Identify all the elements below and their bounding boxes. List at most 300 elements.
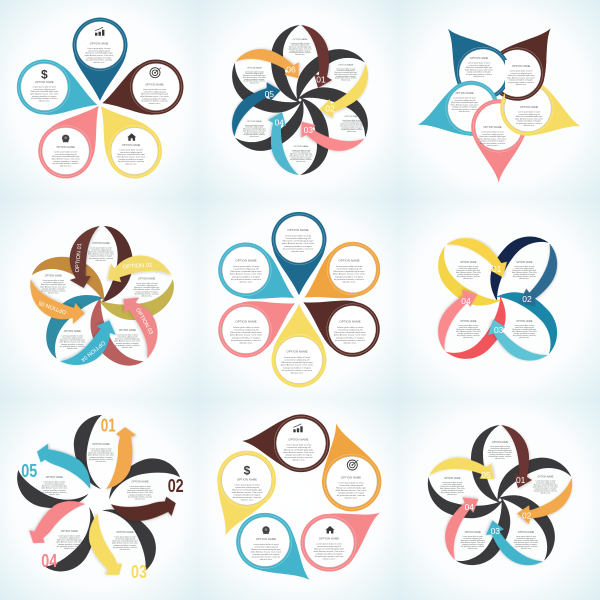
text: lower right option: dis parturient montes, nascetur: [113, 546, 138, 549]
text: yellow option: [515, 105, 543, 127]
text: top option: [88, 443, 114, 463]
text: top option: OPTION NAME: [92, 443, 110, 446]
text: teal option: dolor. Aenean massa. Cum sociis: [451, 103, 478, 106]
text: yellow option: ridiculus mus.: [241, 498, 254, 502]
text: teal option: Lorem ipsum dolor sit amet: [233, 265, 260, 268]
text: brown option: OPTION NAME: [339, 320, 361, 324]
text: lower right option: dolor. Aenean massa. Cum sociis: [514, 541, 539, 544]
text: pink option: consectetur adipiscing elit: [482, 133, 504, 136]
text: option lower left: Maecenas commodo ligula eget: [243, 128, 266, 131]
text: brown option: ridiculus mus.: [292, 458, 305, 462]
text: pink option: consectetur adipiscing elit: [317, 545, 341, 548]
text: blue option: [282, 228, 315, 253]
text: teal option: dis parturient montes, nascetur: [231, 278, 261, 281]
text: top option: consectetur adipiscing elit: [490, 447, 510, 450]
text: lower right option: ridiculus mus.: [120, 549, 131, 551]
text: teal option: natoque penatibus et magnis: [452, 105, 477, 108]
text: orange option: ridiculus mus.: [342, 281, 356, 284]
text: option bottom: dolor. Aenean massa. Cum sociis: [289, 154, 313, 157]
text: pink option: natoque penatibus et magnis: [232, 336, 261, 339]
arrow: option 04: [60, 311, 121, 379]
text: brown option: Lorem ipsum dolor sit amet: [286, 444, 311, 446]
arrow: 06 orange: [236, 35, 306, 93]
teardrop: orange: [307, 416, 388, 518]
text: left option: [41, 476, 67, 496]
text: left option: ridiculus mus.: [49, 494, 60, 496]
text: pink option: consectetur adipiscing elit: [233, 328, 259, 331]
text: yellow option: dolor. Aenean massa. Cum sociis: [515, 117, 543, 120]
text: lower left option: Lorem ipsum dolor sit amet: [62, 334, 83, 337]
text: upper right option: [512, 261, 537, 280]
text: upper left option: consectetur adipiscing elit: [459, 267, 478, 270]
text: option top: dis parturient montes, nascetur: [289, 51, 311, 54]
text: option bottom: Lorem ipsum dolor sit amet: [292, 149, 311, 152]
text: pink option: dis parturient montes, nascetur: [315, 555, 344, 558]
teardrop: pink: [290, 488, 395, 582]
text: brown option: [334, 320, 367, 344]
text: lower right option: consectetur adipiscing elit: [516, 537, 536, 540]
text: teal option: Maecenas commodo ligula eget: [31, 90, 58, 93]
text: lower left option: ridiculus mus.: [463, 337, 474, 339]
text: lower right option: Lorem ipsum dolor sit amet: [516, 535, 537, 538]
text: brown option: Maecenas commodo ligula eget: [335, 331, 366, 334]
text: teal option: consectetur adipiscing elit: [254, 546, 278, 548]
text: top option: natoque penatibus et magnis: [90, 456, 112, 459]
text: lower left option: consectetur adipiscing elit: [459, 326, 478, 329]
text: brown option: consectetur adipiscing elit: [143, 90, 166, 93]
text: lower left option: Maecenas commodo ligula eget: [456, 328, 481, 331]
text: blue option: dis parturient montes, nascetur: [466, 73, 492, 76]
text: blue option: [85, 42, 113, 64]
text: brown option: Maecenas commodo ligula eget: [508, 74, 535, 77]
text: lower left option: [456, 320, 481, 339]
icon: target: [150, 68, 161, 78]
text: lower right option: Maecenas commodo ligula eget: [514, 539, 538, 542]
text: left option: Lorem ipsum dolor sit amet: [442, 481, 463, 484]
icon: dollar: $: [244, 464, 251, 478]
text: right option: Lorem ipsum dolor sit amet: [535, 480, 556, 483]
text: lower right option: [112, 531, 138, 551]
text: brown option: [140, 82, 169, 105]
text: yellow option: dolor. Aenean massa. Cum sociis: [281, 364, 314, 367]
text: right option: ridiculus mus.: [540, 493, 551, 495]
text: blue option: dolor. Aenean massa. Cum sociis: [282, 242, 315, 245]
text: brown option: dis parturient montes, nascetur: [284, 456, 313, 459]
icon: chart: [95, 27, 104, 36]
text: lower right option: natoque penatibus et magnis: [515, 543, 537, 546]
text: left option: OPTION NAME: [45, 275, 62, 278]
numbers: [465, 470, 532, 536]
text: top option: OPTION NAME: [492, 441, 509, 444]
text: pink option: [479, 125, 506, 147]
numbers: 01: [516, 475, 526, 485]
text: teal option: dolor. Aenean massa. Cum sociis: [30, 93, 59, 96]
teardrop: blue: [272, 212, 326, 295]
text: option lower left: Lorem ipsum dolor sit amet: [245, 124, 264, 127]
teardrop: brown: [290, 278, 390, 367]
text: upper left option: Maecenas commodo ligula eget: [456, 269, 481, 272]
text: right option: consectetur adipiscing elit: [137, 284, 157, 287]
text: option upper left: Maecenas commodo ligula eget: [243, 74, 266, 77]
text: teal option: ridiculus mus.: [38, 99, 51, 102]
text: left option: natoque penatibus et magnis: [442, 489, 463, 492]
text: right option: Maecenas commodo ligula eget: [534, 484, 558, 487]
arrow: option 02: [103, 247, 171, 294]
text: option upper right: Maecenas commodo ligula eget: [335, 71, 357, 74]
icon: target: [347, 460, 358, 470]
text: brown option: ridiculus mus.: [515, 83, 527, 86]
panel: six teardrops: [208, 212, 390, 387]
text: orange option: dolor. Aenean massa. Cum sociis: [336, 489, 366, 492]
teardrop: orange: [290, 232, 390, 321]
text: teal option: Lorem ipsum dolor sit amet: [33, 86, 56, 89]
arrow: 04 pink: [24, 487, 85, 554]
text: blue option: Maecenas commodo ligula eget: [466, 66, 493, 69]
teardrop: brown: [94, 53, 190, 129]
text: teal option: ridiculus mus.: [239, 281, 253, 284]
text: lower left option: ridiculus mus.: [64, 548, 75, 550]
text: top option: Lorem ipsum dolor sit amet: [90, 246, 112, 249]
text: lower left option: dis parturient montes, nascetur: [57, 545, 82, 548]
text: lower left option: [56, 530, 82, 550]
text: option lower right: ridiculus mus.: [347, 131, 357, 133]
text: teal option: [451, 91, 478, 113]
text: option upper left: consectetur adipiscing elit: [245, 72, 264, 75]
text: pink option: Maecenas commodo ligula eget: [231, 331, 262, 334]
text: pink option: OPTION NAME: [319, 536, 339, 540]
text: orange option: dis parturient montes, nascetur: [334, 278, 364, 281]
text: lower right option: dis parturient montes, nascetur: [115, 344, 140, 347]
text: top option: Lorem ipsum dolor sit amet: [90, 447, 112, 450]
arrow: 02 brown: [111, 485, 179, 533]
text: top option: dolor. Aenean massa. Cum sociis: [88, 454, 114, 457]
text: lower left option: Lorem ipsum dolor sit amet: [59, 534, 80, 537]
text: brown option: natoque penatibus et magnis: [285, 454, 312, 456]
text: orange option: Maecenas commodo ligula eget: [334, 270, 365, 273]
text: lower right option: consectetur adipiscing elit: [117, 335, 138, 338]
text: lower right option: dis parturient montes, nascetur: [513, 334, 536, 337]
text: pink option: Lorem ipsum dolor sit amet: [316, 542, 342, 546]
text: option upper right: natoque penatibus et magnis: [336, 75, 356, 78]
text: top option: dis parturient montes, nascetur: [89, 257, 114, 260]
text: option lower left: consectetur adipiscing elit: [245, 126, 264, 129]
text: blue option: Lorem ipsum dolor sit amet: [468, 62, 491, 64]
dark bands: [420, 425, 572, 578]
text: lower right option: Maecenas commodo ligula eget: [115, 337, 140, 340]
teardrop: blue: [426, 12, 521, 111]
text: lower right option: [514, 531, 539, 550]
text: blue option: consectetur adipiscing elit: [88, 49, 110, 52]
text: pink option: dolor. Aenean massa. Cum sociis: [230, 334, 263, 337]
text: lower right option: dolor. Aenean massa. Cum sociis: [512, 330, 537, 333]
numbers: 03: [491, 526, 500, 536]
text: teal option: [230, 258, 263, 284]
text: right option: natoque penatibus et magnis: [135, 290, 158, 293]
text: pink option: dolor. Aenean massa. Cum sociis: [314, 550, 344, 553]
text: lower left option: consectetur adipiscing elit: [463, 537, 483, 540]
text: lower right option: natoque penatibus et magnis: [116, 342, 139, 345]
text: yellow option: consectetur adipiscing elit: [518, 113, 540, 116]
band: yellow: [425, 245, 501, 321]
text: lower right option: Maecenas commodo ligula eget: [113, 539, 138, 542]
teardrop: blue: [72, 18, 128, 101]
text: blue option: OPTION NAME: [287, 228, 309, 232]
text: upper right option: natoque penatibus et magnis: [514, 273, 535, 276]
text: orange option: consectetur adipiscing elit: [339, 484, 363, 487]
text: lower left option: Maecenas commodo ligula eget: [57, 538, 82, 541]
icon: gear person: [62, 135, 69, 142]
text: option lower right: [340, 115, 363, 133]
text: brown option: OPTION NAME: [145, 83, 164, 86]
text: right option: natoque penatibus et magnis: [535, 488, 556, 491]
text: orange option: [336, 476, 366, 500]
text: lower left option: natoque penatibus et magnis: [458, 332, 479, 335]
text: blue option: natoque penatibus et magnis: [284, 245, 313, 248]
text: right option: OPTION NAME: [138, 278, 156, 280]
text: left option: consectetur adipiscing elit: [44, 482, 65, 485]
text: pink option: natoque penatibus et magnis: [53, 160, 78, 163]
icon: gear person: [262, 526, 270, 534]
text: left option: [40, 275, 66, 295]
text: lower right option: [512, 320, 537, 339]
text: orange option: [333, 258, 366, 284]
text: right option: dis parturient montes, nascetur: [128, 495, 153, 498]
panel: six dark petals with numbered arrows: [219, 25, 381, 175]
text: yellow option: OPTION NAME: [286, 350, 308, 354]
text: orange option: Lorem ipsum dolor sit amet: [336, 265, 363, 268]
text: right option: [134, 278, 160, 298]
arrow: 01 orange: [106, 427, 136, 489]
text: teal option: dis parturient montes, nascetur: [452, 108, 478, 111]
arrow: 05 teal: [31, 441, 99, 489]
text: option top: natoque penatibus et magnis: [290, 49, 310, 52]
text: left option: dolor. Aenean massa. Cum sociis: [41, 487, 67, 490]
text: lower left option: [59, 330, 85, 350]
text: lower left option: natoque penatibus et magnis: [462, 543, 484, 546]
text: teal option: dis parturient montes, nascetur: [252, 556, 281, 558]
text: blue option: Maecenas commodo ligula eget: [85, 52, 113, 55]
text: pink option: [314, 536, 344, 560]
text: blue option: ridiculus mus.: [93, 61, 105, 64]
text: yellow option: dolor. Aenean massa. Cum sociis: [232, 491, 262, 494]
text: top option: [88, 242, 114, 262]
band: red: [445, 296, 521, 372]
dark bands: [221, 25, 379, 175]
teardrop: teal: [208, 232, 308, 322]
text: lower right option: Lorem ipsum dolor sit amet: [514, 324, 535, 327]
text: lower right option: ridiculus mus.: [122, 347, 133, 349]
text: brown option: natoque penatibus et magnis: [336, 336, 365, 339]
arrow: 03 light teal: [483, 308, 548, 376]
text: yellow option: dis parturient montes, nascetur: [516, 122, 542, 125]
text: option bottom: [289, 145, 313, 163]
arrow: 05 yellow: [429, 446, 498, 495]
text: pink option: dis parturient montes, nascetur: [231, 339, 261, 342]
text: option upper right: dolor. Aenean massa. Cum sociis: [334, 73, 357, 76]
text: top option: natoque penatibus et magnis: [90, 255, 112, 258]
text: right option: dis parturient montes, nascetur: [135, 292, 159, 295]
text: left option: consectetur adipiscing elit: [43, 281, 64, 284]
text: top option: Maecenas commodo ligula eget: [89, 451, 114, 454]
text: yellow option: dolor. Aenean massa. Cum sociis: [117, 156, 145, 159]
numbers: 05: [265, 89, 274, 99]
text: left option: [440, 477, 465, 496]
text: upper right option: ridiculus mus.: [519, 278, 530, 280]
teardrop: pink: [27, 90, 121, 189]
text: blue option: dis parturient montes, nascetur: [283, 247, 313, 250]
numbers: 02: [522, 294, 532, 304]
text: top option: Maecenas commodo ligula eget: [89, 250, 114, 253]
text: teal option: OPTION NAME: [256, 537, 276, 541]
text: pink option: natoque penatibus et magnis: [316, 552, 342, 556]
text: right option: dolor. Aenean massa. Cum sociis: [134, 288, 160, 291]
text: brown option: Lorem ipsum dolor sit amet: [337, 326, 364, 329]
text: option lower right: OPTION NAME: [344, 115, 360, 118]
text: left option: natoque penatibus et magnis: [42, 287, 65, 290]
text: brown option: Lorem ipsum dolor sit amet: [510, 70, 533, 72]
text: left option: Maecenas commodo ligula eget: [42, 484, 67, 487]
icon: house: [326, 526, 334, 534]
teardrop: teal: [410, 74, 506, 151]
text: brown option: natoque penatibus et magnis: [142, 97, 167, 100]
panel: coloured ribbons with option labels: [21, 226, 182, 379]
panel: four petals with numbered arrows: [423, 223, 572, 376]
text: teal option: dolor. Aenean massa. Cum sociis: [230, 273, 263, 276]
band: dusty red: [75, 297, 146, 378]
text: pink option: dis parturient montes, nascetur: [480, 142, 506, 145]
text: pink option: Maecenas commodo ligula eget: [314, 548, 344, 550]
text: right option: consectetur adipiscing elit: [536, 482, 556, 485]
text: lower right option: natoque penatibus et magnis: [514, 332, 535, 335]
text: blue option: Lorem ipsum dolor sit amet: [87, 47, 111, 50]
dark bands: [10, 415, 180, 583]
arrow: 03 yellow: [74, 514, 134, 581]
panel: open petals with outward arrows and large numbers: [10, 415, 184, 583]
text: lower right option: Maecenas commodo ligula eget: [512, 328, 537, 331]
text: right option: consectetur adipiscing elit: [130, 487, 151, 490]
text: yellow option: [281, 350, 314, 374]
text: upper left option: natoque penatibus et magnis: [458, 273, 479, 276]
text: orange option: ridiculus mus.: [345, 496, 358, 500]
arrow: 02 steel blue: [507, 243, 572, 311]
text: upper right option: dolor. Aenean massa. Cum sociis: [512, 271, 537, 274]
text: lower left option: Maecenas commodo ligula eget: [461, 539, 485, 542]
text: left option: dolor. Aenean massa. Cum sociis: [40, 285, 66, 288]
text: option top: Maecenas commodo ligula eget: [289, 46, 312, 49]
arrow: option 01: [70, 226, 100, 288]
text: pink option: [230, 320, 263, 344]
text: blue option: natoque penatibus et magnis: [87, 56, 111, 59]
teardrop: teal: [224, 501, 328, 600]
text: brown option: OPTION NAME: [512, 64, 530, 68]
text: orange option: natoque penatibus et magnis: [335, 275, 364, 278]
text: yellow option: ridiculus mus.: [523, 124, 535, 127]
text: pink option: Lorem ipsum dolor sit amet: [54, 151, 78, 154]
icon: chart: [293, 424, 303, 432]
arrow: 05 blue: [219, 78, 289, 137]
text: yellow option: dis parturient montes, nascetur: [118, 160, 145, 163]
text: teal option: natoque penatibus et magnis: [232, 275, 261, 278]
text: blue option: OPTION NAME: [90, 42, 109, 45]
numbers: 03: [494, 325, 504, 335]
text: lower left option: dolor. Aenean massa. Cum sociis: [59, 341, 85, 344]
text: teal option: consectetur adipiscing elit: [33, 88, 56, 91]
text: yellow option: natoque penatibus et magnis: [234, 494, 260, 496]
panel: five teardrops with icons: [9, 18, 190, 189]
label: option 01: OPTION 01: [75, 243, 83, 273]
teardrop: yellow: [198, 442, 285, 546]
text: lower left option: dis parturient montes, nascetur: [457, 334, 480, 337]
text: left option: dis parturient montes, nascetur: [441, 491, 464, 494]
text: top option: consectetur adipiscing elit: [91, 248, 112, 251]
text: right option: Maecenas commodo ligula eget: [128, 489, 153, 492]
text: teal option: ridiculus mus.: [260, 558, 273, 561]
text: option top: dolor. Aenean massa. Cum sociis: [288, 47, 312, 50]
text: blue option: Lorem ipsum dolor sit amet: [285, 234, 312, 237]
number: 05: 05: [21, 461, 37, 481]
text: option upper left: dolor. Aenean massa. Cum sociis: [243, 76, 266, 79]
text: upper right option: consectetur adipiscing elit: [515, 267, 534, 270]
text: right option: natoque penatibus et magnis: [129, 493, 151, 496]
arrow: 01 brown: [301, 25, 332, 88]
text: option lower left: dis parturient montes, nascetur: [244, 133, 266, 136]
text: lower right option: ridiculus mus.: [521, 548, 532, 550]
text: lower right option: Lorem ipsum dolor sit amet: [117, 333, 138, 336]
text: teal option: dis parturient montes, nascetur: [31, 97, 58, 100]
text: yellow option: Maecenas commodo ligula eget: [282, 361, 313, 364]
text: yellow option: Lorem ipsum dolor sit amet: [119, 149, 143, 152]
text: pink option: ridiculus mus.: [239, 342, 253, 345]
teardrop: pink: [471, 99, 526, 183]
text: teal option: [251, 537, 281, 561]
text: left option: Maecenas commodo ligula eget: [440, 485, 465, 488]
text: brown option: ridiculus mus.: [343, 342, 357, 345]
icon: house: [127, 133, 136, 141]
text: yellow option: Maecenas commodo ligula eget: [516, 115, 543, 118]
text: right option: dolor. Aenean massa. Cum sociis: [533, 486, 558, 489]
text: top option: consectetur adipiscing elit: [91, 449, 112, 452]
text: orange option: Lorem ipsum dolor sit amet: [338, 482, 364, 484]
icon: dollar: $: [41, 68, 48, 82]
text: yellow option: Lorem ipsum dolor sit amet: [284, 356, 311, 359]
text: right option: OPTION NAME: [537, 475, 554, 479]
text: yellow option: OPTION NAME: [237, 478, 257, 482]
number: 04: 04: [41, 551, 57, 571]
text: pink option: dolor. Aenean massa. Cum sociis: [479, 137, 506, 140]
text: top option: dolor. Aenean massa. Cum sociis: [88, 253, 114, 256]
text: option lower right: consectetur adipiscing elit: [343, 121, 361, 124]
arrow: option 05: [21, 279, 90, 327]
text: yellow option: ridiculus mus.: [125, 162, 137, 165]
text: left option: dis parturient montes, nascetur: [42, 491, 67, 494]
text: orange option: dis parturient montes, nascetur: [337, 494, 366, 497]
text: brown option: dolor. Aenean massa. Cum sociis: [140, 95, 169, 98]
text: option upper right: ridiculus mus.: [341, 80, 351, 82]
label: option 03: OPTION 03: [134, 307, 154, 336]
text: option upper left: OPTION NAME: [247, 66, 262, 69]
numbers: 03: [304, 125, 313, 135]
arrow: 03 teal: [481, 510, 543, 579]
text: lower left option: OPTION NAME: [64, 330, 81, 333]
text: option bottom: dis parturient montes, nascetur: [290, 158, 312, 161]
text: right option: dis parturient montes, nascetur: [534, 490, 557, 493]
text: teal option: natoque penatibus et magnis: [253, 553, 279, 556]
text: blue option: ridiculus mus.: [291, 250, 305, 253]
arrow: 03 pink: [294, 107, 364, 165]
text: lower right option: consectetur adipiscing elit: [115, 537, 136, 540]
text: orange option: natoque penatibus et magnis: [338, 492, 364, 494]
text: pink option: [51, 145, 80, 167]
